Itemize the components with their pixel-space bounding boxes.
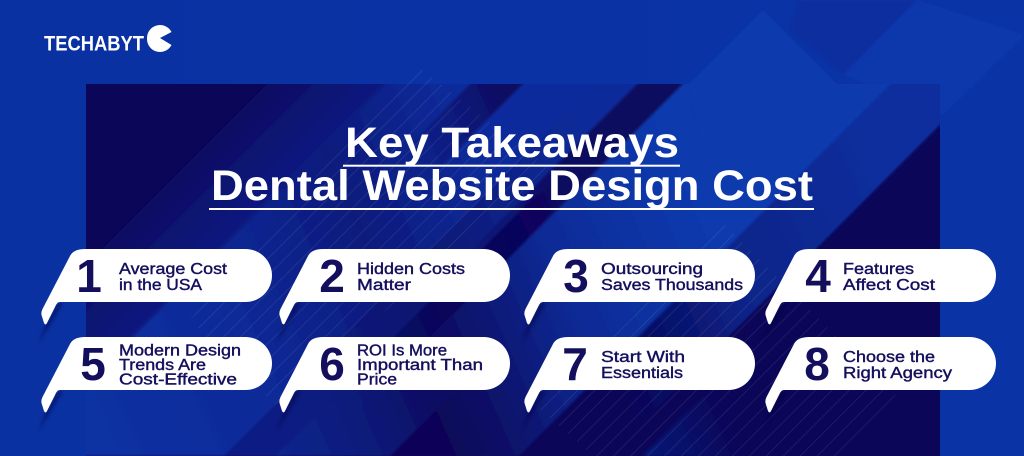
card 7: Start With Essentials (521, 337, 755, 432)
card 2: Hidden Costs Matter: 2 (319, 250, 345, 302)
card 8: Choose the Right Agency: Right Agency (843, 365, 952, 382)
dark panel with diagonal bands (70, 74, 950, 456)
card 1: Average Cost in the USA: 1 (76, 250, 102, 302)
logo: TECHABYT (44, 32, 144, 56)
card 8: Choose the Right Agency: Choose the (843, 349, 935, 366)
title: Dental Website Design Cost (211, 162, 813, 210)
card 5: Modern Design Trends Are Cost-Effective (38, 337, 272, 432)
logo (44, 25, 172, 56)
bright diamond top of band (689, 10, 863, 136)
card 1: Average Cost in the USA: in the USA (119, 277, 203, 294)
card 4: Features Affect Cost: 4 (805, 250, 831, 302)
title (209, 119, 814, 210)
card 2: Hidden Costs Matter (276, 249, 510, 344)
card 8: Choose the Right Agency: 8 (804, 338, 830, 390)
card 1: Average Cost in the USA (38, 249, 272, 344)
card 5: Modern Design Trends Are Cost-Effective: Cost-Effective (119, 372, 237, 388)
card 7: Start With Essentials: Essentials (601, 365, 683, 382)
card 3: Outsourcing Saves Thousands: Outsourcing (601, 261, 703, 278)
diagonal hairline stripes (190, 64, 900, 456)
card 3: Outsourcing Saves Thousands (521, 249, 755, 344)
card 6: ROI Is More Important Than Price: Price (357, 372, 397, 388)
card 4: Features Affect Cost (762, 249, 996, 344)
card 3: Outsourcing Saves Thousands: 3 (563, 250, 589, 302)
icon: pacman (147, 25, 172, 52)
card 5: Modern Design Trends Are Cost-Effective: 5 (80, 338, 106, 390)
card 2: Hidden Costs Matter: Hidden Costs (357, 261, 465, 278)
card 6: ROI Is More Important Than Price: ROI Is More (357, 342, 447, 360)
title: Key Takeaways (345, 119, 679, 167)
card 8: Choose the Right Agency (762, 337, 996, 432)
card 5: Modern Design Trends Are Cost-Effective: Modern Design (119, 342, 241, 360)
card 7: Start With Essentials: 7 (562, 338, 588, 390)
card 3: Outsourcing Saves Thousands: Saves Thousands (601, 277, 743, 294)
card 6: ROI Is More Important Than Price (276, 337, 510, 432)
card 1: Average Cost in the USA: Average Cost (119, 261, 228, 278)
card 4: Features Affect Cost: Affect Cost (843, 277, 936, 294)
card 4: Features Affect Cost: Features (843, 261, 914, 278)
card 7: Start With Essentials: Start With (601, 349, 685, 366)
card 5: Modern Design Trends Are Cost-Effective: Trends Are (119, 357, 206, 374)
card 6: ROI Is More Important Than Price: Important Than (357, 357, 483, 374)
card 2: Hidden Costs Matter: Matter (357, 277, 411, 294)
card 6: ROI Is More Important Than Price: 6 (319, 338, 345, 390)
